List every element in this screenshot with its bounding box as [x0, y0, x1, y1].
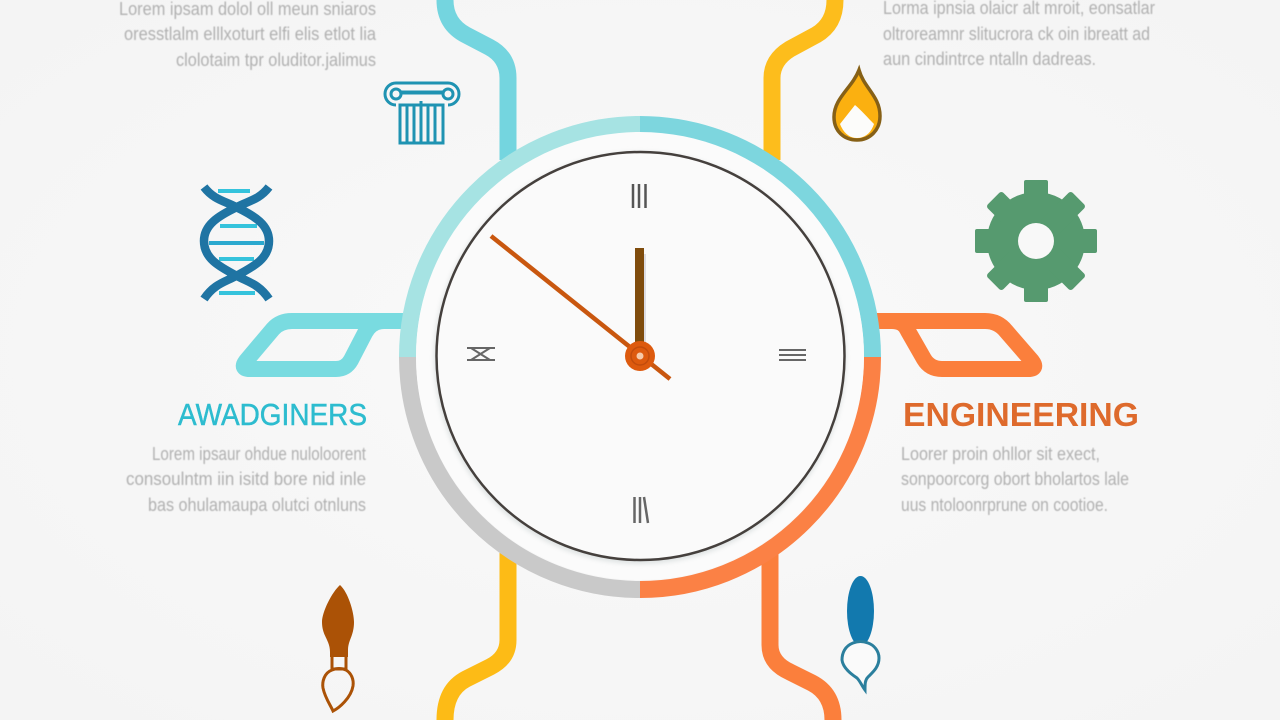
- tick: six: [634, 497, 648, 523]
- clock ring: light teal segment: [408, 124, 640, 357]
- connector: left teal loop: [244, 321, 408, 369]
- icon: brush, brown: [322, 585, 354, 711]
- text: top right paragraph: [883, 0, 1155, 69]
- connector: bottom right orange: [770, 552, 833, 720]
- icon: brush, blue: [842, 576, 879, 690]
- tick: three: [779, 350, 806, 360]
- text: left paragraph: bas ohulamaupa olutci otnluns: [148, 495, 366, 515]
- heading: left: AWADGINERS: [178, 397, 367, 432]
- text: right paragraph: sonpoorcorg obort bholartos lale: [901, 469, 1129, 489]
- minute hand: [491, 236, 670, 379]
- text: right paragraph: Loorer proin ohllor sit exect,: [901, 444, 1100, 464]
- clock bezel: [416, 132, 864, 580]
- text: top right paragraph: oltroreamnr slitucrora ck oin ibreatt ad: [883, 24, 1150, 44]
- heading: engineering: ENGINEERING: [903, 396, 1139, 433]
- text: top left paragraph: oresstlalm elllxoturt elfi elis etlot lia: [124, 24, 377, 44]
- text: top left paragraph: clolotaim tpr oluditor.jalimus: [176, 50, 376, 70]
- text: left paragraph: Lorem ipsaur ohdue nuloloorent: [152, 444, 366, 464]
- clock face: [436, 152, 844, 560]
- text: left paragraph: [126, 444, 366, 515]
- icon: column: [385, 83, 459, 143]
- text: right paragraph: uus ntoloonrprune on cootioe.: [901, 495, 1108, 515]
- tick: twelve: [633, 184, 646, 208]
- hand pivot: [625, 341, 655, 371]
- hour hand: [635, 248, 646, 346]
- text: top left paragraph: [119, 0, 377, 70]
- text: right paragraph: [901, 444, 1129, 515]
- clock ring: teal segment: [640, 124, 872, 357]
- icon: flame drop: [834, 70, 880, 140]
- connector: bottom left yellow: [445, 552, 508, 720]
- clock face shadow: [434, 152, 846, 564]
- clock ring: grey segment: [408, 357, 640, 590]
- text: left paragraph: consoulntm iin isitd bore nid inle: [126, 469, 366, 489]
- tick: nine: [467, 348, 495, 360]
- icon: DNA helix: [204, 187, 269, 299]
- clock ring: orange segment: [640, 357, 872, 590]
- connector: top right yellow: [772, 0, 835, 160]
- icon: gear: [975, 180, 1097, 302]
- connector: right orange loop: [875, 321, 1034, 369]
- clock: [408, 124, 872, 590]
- text: top right paragraph: aun cindintrce ntalln dadreas.: [883, 49, 1096, 69]
- connector: top left teal: [445, 0, 508, 160]
